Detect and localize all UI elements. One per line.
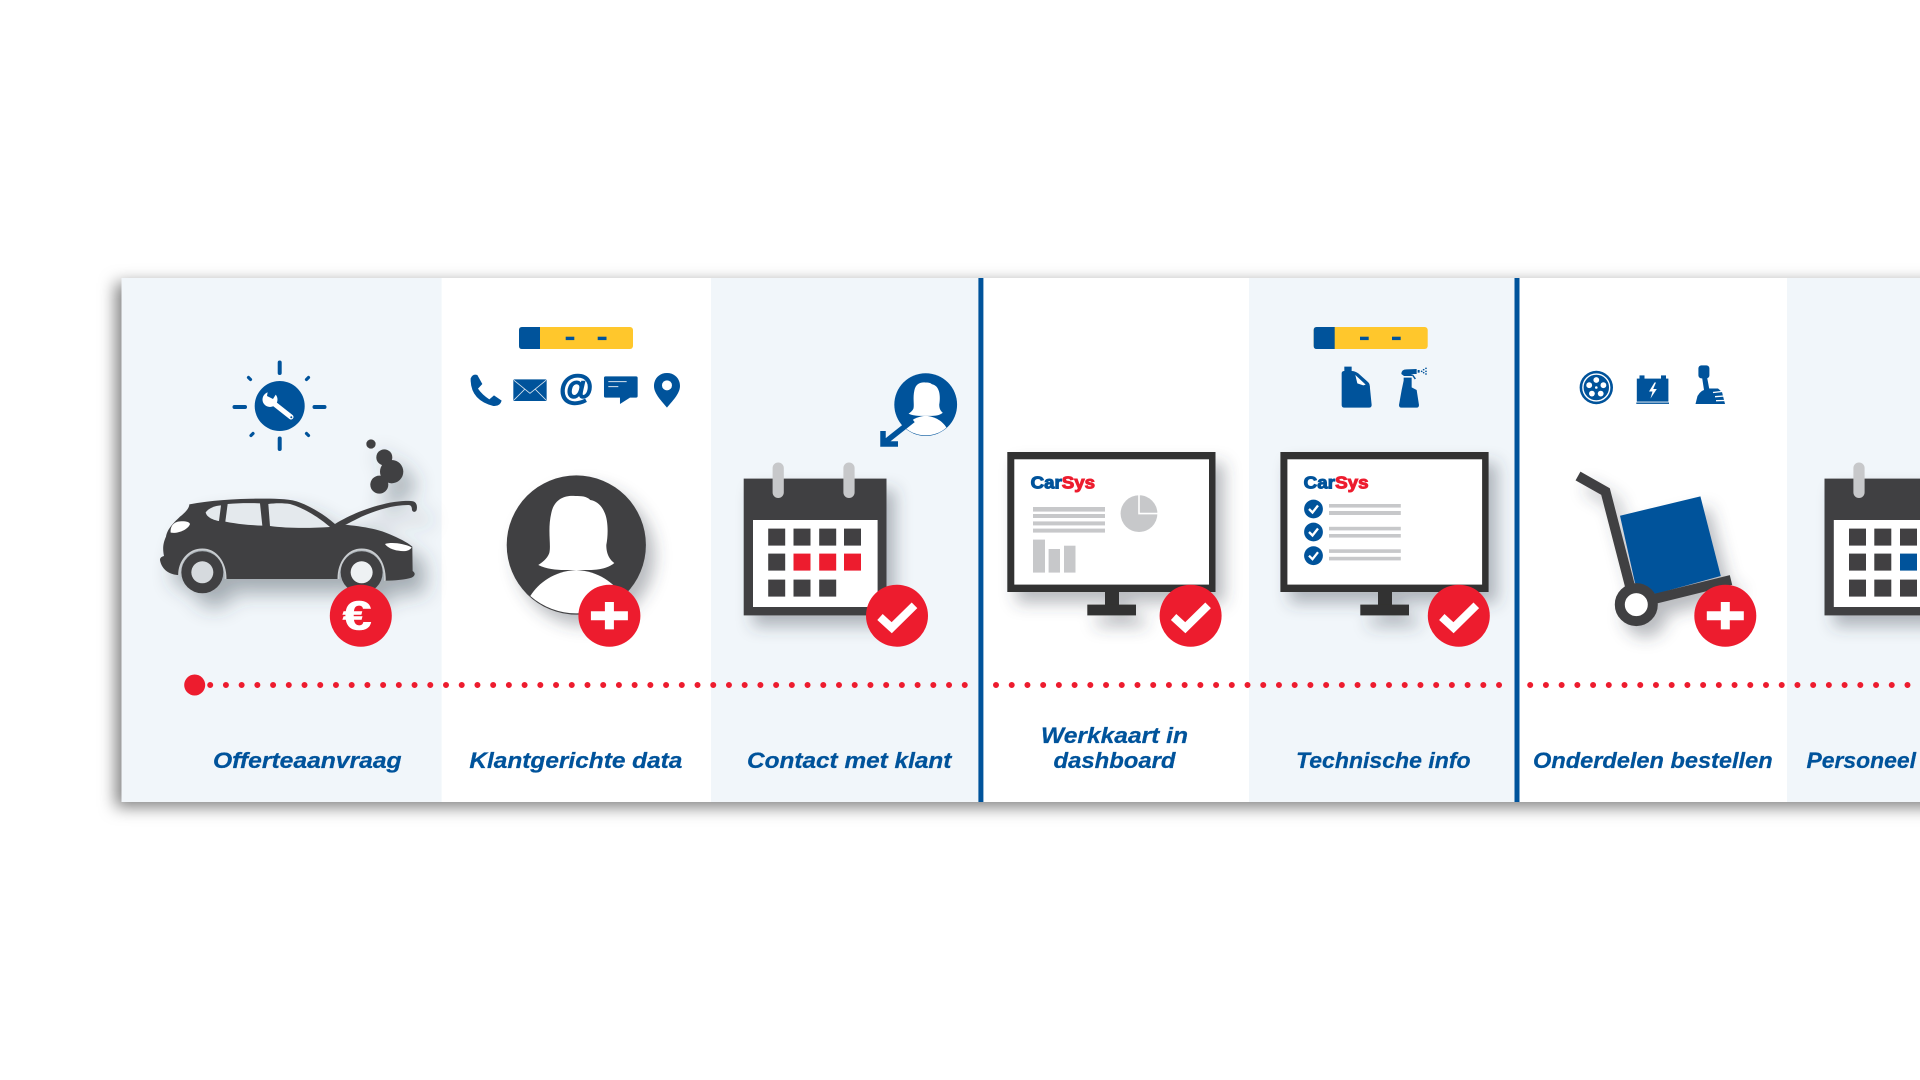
column: Werkkaart in dashboard	[1007, 452, 1222, 773]
icons: contact channels	[471, 369, 680, 408]
icon: calendar	[1824, 462, 1920, 615]
text lines	[1033, 507, 1105, 533]
label: Technische info	[1296, 748, 1471, 773]
badge: euro	[330, 585, 392, 647]
logo: CarSys: CarSys	[1304, 473, 1369, 493]
column: Contact met klant	[744, 373, 957, 773]
checklist	[1304, 500, 1401, 565]
icons: fluids	[1342, 367, 1427, 408]
icon: battery	[1636, 375, 1669, 404]
divider: blue line 1	[978, 278, 983, 802]
icon: gear shifter	[1696, 365, 1725, 404]
badge: check	[1428, 585, 1490, 647]
icon: customer avatar	[507, 475, 646, 615]
icon: chat bubble	[604, 376, 638, 404]
column: Klantgerichte data	[469, 327, 682, 773]
icon: calendar	[744, 462, 886, 615]
icon: yellow license plate	[519, 327, 633, 349]
icon: phone	[471, 375, 502, 406]
icon: spray bottle	[1399, 367, 1427, 408]
icon: hand cart with box	[1578, 476, 1731, 621]
icon: monitor with dashboard	[1007, 452, 1216, 615]
icon: at sign: @	[559, 369, 593, 407]
pie chart	[1121, 494, 1159, 532]
column: Technische info	[1280, 327, 1490, 773]
bar chart	[1033, 540, 1076, 573]
icon: yellow license plate	[1314, 327, 1428, 349]
panel: background strip	[122, 278, 1920, 802]
column: Onderdelen bestellen	[1533, 365, 1773, 773]
label: Offerteaanvraag	[213, 748, 402, 773]
badge: check	[866, 585, 928, 647]
icon: oil bottle	[1342, 367, 1372, 408]
badge: plus	[1694, 585, 1756, 647]
icon: small customer avatar with arrow	[883, 373, 957, 444]
badge: euro: €	[343, 592, 372, 638]
icon: wheel	[1580, 371, 1613, 404]
badge: check	[1160, 585, 1222, 647]
icon: location pin	[654, 373, 680, 408]
label: Werkkaart in	[1041, 723, 1188, 748]
icon: broken-down car with smoke	[160, 439, 417, 593]
icon: envelope	[513, 379, 547, 401]
icon: monitor with checklist	[1280, 452, 1489, 615]
divider: blue line 2	[1514, 278, 1520, 802]
label: dashboard	[1054, 748, 1176, 773]
badge: plus	[578, 585, 640, 647]
label	[1041, 723, 1188, 773]
column: Offerteaanvraag	[160, 362, 417, 773]
logo: CarSys: CarSys	[1031, 473, 1095, 493]
column: Personeel	[1806, 462, 1920, 773]
label: Contact met klant	[747, 748, 953, 773]
label: Personeel	[1806, 748, 1917, 773]
icon: wrench sun	[234, 362, 324, 449]
label: Klantgerichte data	[469, 748, 682, 773]
label: Onderdelen bestellen	[1533, 748, 1773, 773]
timeline: red dotted line with start dot	[184, 674, 1920, 696]
